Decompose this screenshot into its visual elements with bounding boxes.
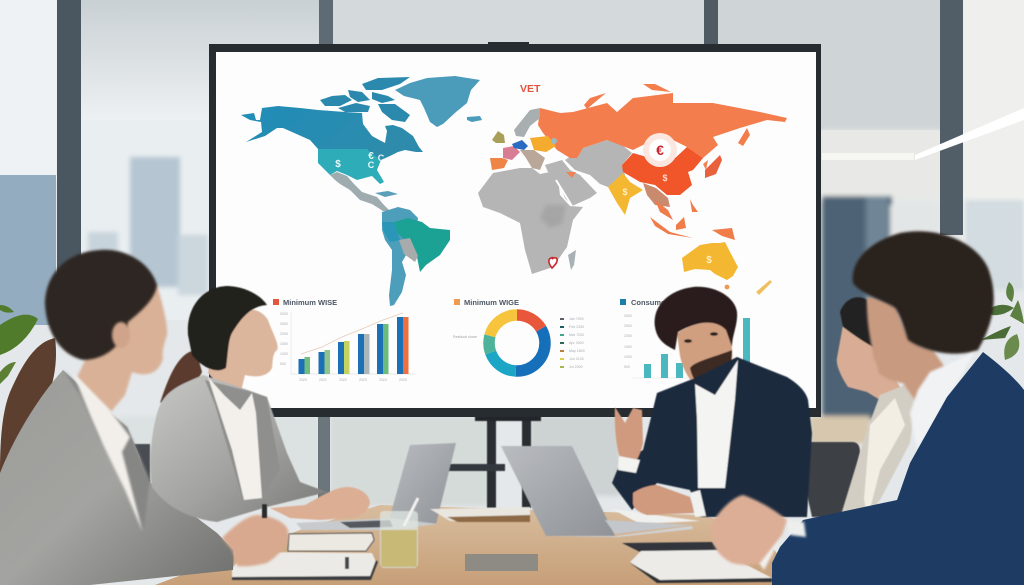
laptop: left — [296, 443, 456, 530]
bar chart: 2500 — [280, 322, 288, 326]
bar chart: 3000 — [280, 312, 288, 316]
consumer bar chart: 1500 — [624, 345, 632, 349]
donut chart — [453, 298, 585, 371]
consumer bar chart: 3000 — [624, 314, 632, 318]
consumer bar chart: Consumer — [631, 298, 668, 307]
hand — [270, 487, 370, 520]
hair — [655, 287, 737, 350]
eyes — [684, 332, 718, 343]
map: label: VET — [520, 83, 541, 95]
beard — [690, 350, 732, 388]
buildings seen through windows — [88, 130, 1024, 506]
laptop: centre — [501, 446, 693, 537]
map: currency markers: $ — [706, 255, 712, 266]
blazer — [840, 385, 917, 518]
hair — [853, 231, 994, 354]
lower hand — [633, 485, 695, 515]
left plant — [0, 305, 38, 384]
cuffs — [757, 535, 782, 570]
map: Europe — [490, 108, 557, 170]
donut chart: Residual share — [453, 335, 477, 339]
bar chart: Minimum WISE — [283, 298, 337, 307]
display stand — [445, 415, 541, 508]
ponytail — [0, 338, 56, 475]
shirt — [695, 360, 738, 488]
neck — [697, 365, 738, 400]
person: man in navy foreground — [710, 231, 1024, 585]
blazer — [0, 370, 234, 585]
jacket — [772, 352, 1024, 585]
map: currency markers: $ — [335, 159, 341, 170]
consumer bar chart: 500 — [624, 365, 630, 369]
map: currency markers — [335, 133, 712, 268]
map: Central America — [330, 172, 390, 211]
ear — [112, 322, 130, 348]
lower cuff — [690, 490, 706, 517]
bar chart: 2025 — [399, 378, 407, 382]
hair — [840, 297, 875, 348]
display screen — [209, 42, 821, 417]
person: woman at right — [837, 297, 917, 518]
map: South America — [382, 207, 450, 306]
bar chart — [273, 298, 415, 382]
map: Africa and Middle East — [478, 140, 632, 274]
bar chart: 2000 — [280, 332, 288, 336]
map: currency markers: $ — [622, 187, 628, 197]
shirt — [73, 373, 143, 533]
raised hand — [615, 407, 643, 461]
bar chart: 2020 — [299, 378, 307, 382]
person: presenting man — [612, 287, 812, 517]
map: Asia — [566, 147, 735, 240]
papers on table — [430, 507, 700, 524]
tablet on table — [465, 554, 538, 571]
right plant — [981, 282, 1024, 360]
consumer bar chart: 2000 — [624, 334, 632, 338]
map: North America — [241, 76, 482, 211]
map: currency markers: € — [368, 151, 374, 162]
ponytail — [160, 350, 202, 403]
map: Russia — [538, 93, 787, 158]
chair: left — [132, 444, 150, 484]
map: currency markers: C — [378, 153, 385, 163]
hand — [222, 515, 288, 566]
map: currency markers: € — [656, 142, 664, 158]
notebook: upper — [288, 533, 374, 551]
donut legend: Mar 7200 — [569, 333, 584, 337]
shirt collar — [910, 352, 975, 450]
donut legend: Jul 2300 — [569, 365, 583, 369]
blazer — [150, 375, 327, 522]
notebook: front — [232, 552, 378, 580]
bar chart: 1000 — [280, 352, 288, 356]
map: Australia — [682, 242, 772, 295]
glass of water — [380, 498, 418, 568]
bar chart: 2021 — [319, 378, 327, 382]
hair — [45, 250, 157, 360]
conference table — [155, 505, 800, 585]
neck and face — [77, 285, 167, 413]
consumer bar chart: 1000 — [624, 355, 632, 359]
map: currency markers: C — [368, 160, 375, 170]
face and neck — [837, 322, 900, 400]
donut legend: May 1800 — [569, 349, 585, 353]
consumer bar chart — [620, 298, 750, 378]
jacket — [612, 357, 812, 517]
bar chart: 500 — [280, 362, 286, 366]
chair: centre — [806, 442, 860, 517]
bar chart: 2023 — [359, 378, 367, 382]
person: woman in grey blazer — [150, 286, 370, 522]
consumer bar chart: 2500 — [624, 324, 632, 328]
face — [867, 297, 948, 400]
donut legend: Feb 2300 — [569, 325, 584, 329]
face — [677, 322, 732, 388]
bar chart: 1500 — [280, 342, 288, 346]
bar chart: 2022 — [339, 378, 347, 382]
donut chart: Minimum WIGE — [464, 298, 519, 307]
donut legend: Jun 2100 — [569, 357, 584, 361]
notebook: right — [622, 542, 772, 583]
donut legend: Apr 2500 — [569, 341, 584, 345]
donut legend: Jan 7500 — [569, 317, 584, 321]
person: woman in foreground left — [0, 250, 288, 585]
neck and face — [208, 309, 278, 395]
map: currency markers: $ — [662, 173, 668, 183]
bar chart: 2024 — [379, 378, 387, 382]
donut legend — [560, 317, 585, 369]
hair — [188, 286, 267, 370]
shirt — [208, 377, 262, 500]
cuff — [618, 456, 640, 473]
clasped hands — [710, 495, 787, 565]
world map — [241, 76, 787, 306]
blouse — [864, 398, 905, 517]
